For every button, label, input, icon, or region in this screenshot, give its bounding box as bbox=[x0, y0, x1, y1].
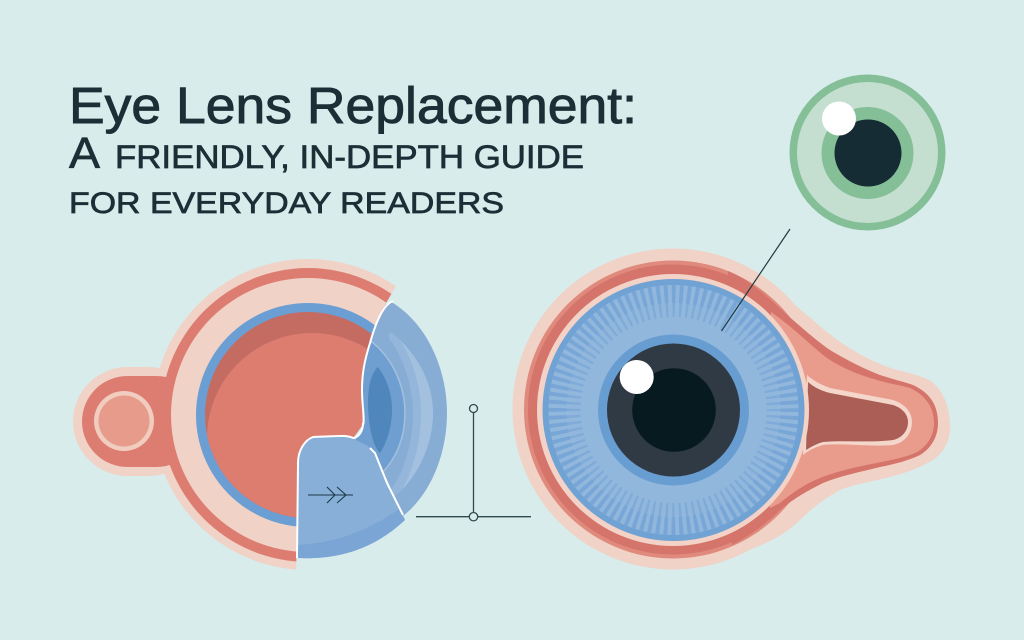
title: A bbox=[69, 129, 101, 178]
knob inner ring bbox=[94, 391, 154, 451]
sclera inner ring bbox=[537, 274, 809, 546]
iris bbox=[542, 279, 804, 541]
red wall layer bbox=[524, 260, 938, 558]
blue lens crescent bbox=[352, 301, 447, 516]
title: FOR EVERYDAY READERS bbox=[69, 187, 504, 220]
salmon tail fill bbox=[770, 312, 934, 508]
diagram: left eye cross-section bbox=[73, 259, 464, 570]
outer wall bbox=[82, 259, 396, 570]
pupil bbox=[607, 344, 740, 476]
diagram: right eye front view bbox=[512, 248, 950, 570]
connector bracket bbox=[416, 404, 531, 521]
title: FRIENDLY, IN-DEPTH GUIDE bbox=[115, 139, 584, 175]
leader line bbox=[722, 229, 790, 331]
optic wedge bbox=[803, 375, 912, 455]
icon: green lens bbox=[790, 74, 946, 230]
knob pale backing bbox=[73, 367, 203, 476]
pale outer silhouette bbox=[512, 248, 950, 570]
title: Eye Lens Replacement: bbox=[69, 77, 637, 134]
arrow bbox=[308, 487, 353, 503]
title bbox=[69, 77, 637, 220]
blue lens insert piece bbox=[297, 423, 405, 558]
